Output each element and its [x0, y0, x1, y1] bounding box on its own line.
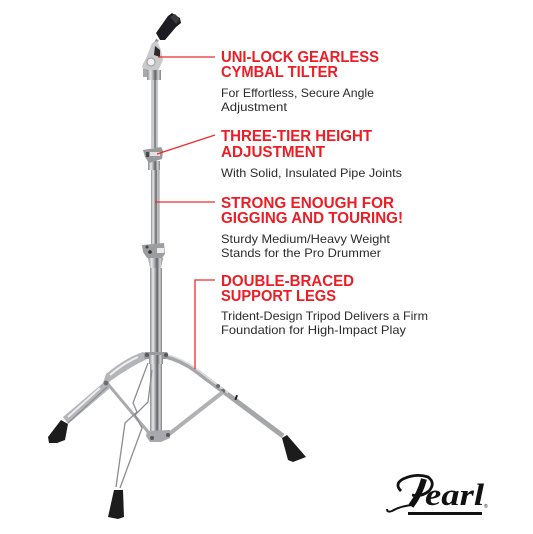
- heading: strength: GIGGING AND TOURING!: [221, 210, 403, 227]
- body: legs: Foundation for High-Impact Play: [221, 323, 406, 337]
- heading: strength: STRONG ENOUGH FOR: [221, 195, 394, 212]
- leader: strength: [155, 201, 215, 203]
- lower thick pipe: [150, 268, 162, 433]
- right leg: [165, 354, 283, 436]
- leader: legs: [195, 280, 215, 369]
- body: tilter: For Effortless, Secure Angle: [221, 86, 374, 100]
- leader: height adjustment: [157, 135, 215, 154]
- body: height: With Solid, Insulated Pipe Joints: [221, 166, 402, 180]
- cymbal stand illustration: [48, 13, 306, 519]
- upper height clamp: [143, 147, 163, 170]
- heading: tilter: [221, 49, 379, 81]
- heading: strength: [221, 195, 403, 227]
- icon: rubber cymbal clamp: [154, 13, 181, 45]
- body: strength: Sturdy Medium/Heavy Weight: [221, 232, 391, 246]
- body: strength: [221, 232, 391, 260]
- body: tilter: Adjustment: [221, 100, 288, 114]
- Pearl logo: earl: [425, 477, 484, 512]
- callout: legs: [221, 273, 428, 337]
- callout leader lines: [155, 57, 215, 369]
- heading: legs: DOUBLE-BRACED: [221, 273, 354, 290]
- icon: center rubber foot: [108, 490, 124, 519]
- leader: tilter: [158, 56, 215, 58]
- front wire brace: [116, 363, 152, 488]
- heading: height: [221, 128, 372, 161]
- callout: strength: [221, 195, 403, 260]
- leg braces: [104, 381, 223, 435]
- icon: gearless tilter: [142, 41, 163, 80]
- middle pipe: [151, 170, 160, 244]
- heading: legs: [221, 273, 354, 305]
- Pearl logo: ®: [484, 503, 488, 510]
- body: legs: Trident-Design Tripod Delivers a Firm: [221, 309, 428, 323]
- icon: right rubber foot: [282, 435, 306, 462]
- left leg: [63, 352, 147, 424]
- Pearl logo: [387, 475, 488, 515]
- body: tilter: [221, 86, 374, 114]
- body: legs: [221, 309, 428, 337]
- heading: legs: SUPPORT LEGS: [221, 288, 336, 305]
- callout: tilter: [221, 49, 379, 114]
- lower leg collar: [146, 430, 170, 442]
- lower height clamp: [142, 243, 165, 268]
- callout: height: [221, 128, 402, 180]
- heading: height: ADJUSTMENT: [221, 144, 325, 161]
- upper leg hub: [144, 352, 168, 364]
- heading: tilter: UNI-LOCK GEARLESS: [221, 49, 379, 66]
- heading: height: THREE-TIER HEIGHT: [221, 128, 372, 145]
- body: strength: Stands for the Pro Drummer: [221, 246, 381, 260]
- heading: tilter: CYMBAL TILTER: [221, 64, 338, 81]
- icon: left rubber foot: [48, 420, 68, 443]
- upper thin pipe: [152, 80, 158, 148]
